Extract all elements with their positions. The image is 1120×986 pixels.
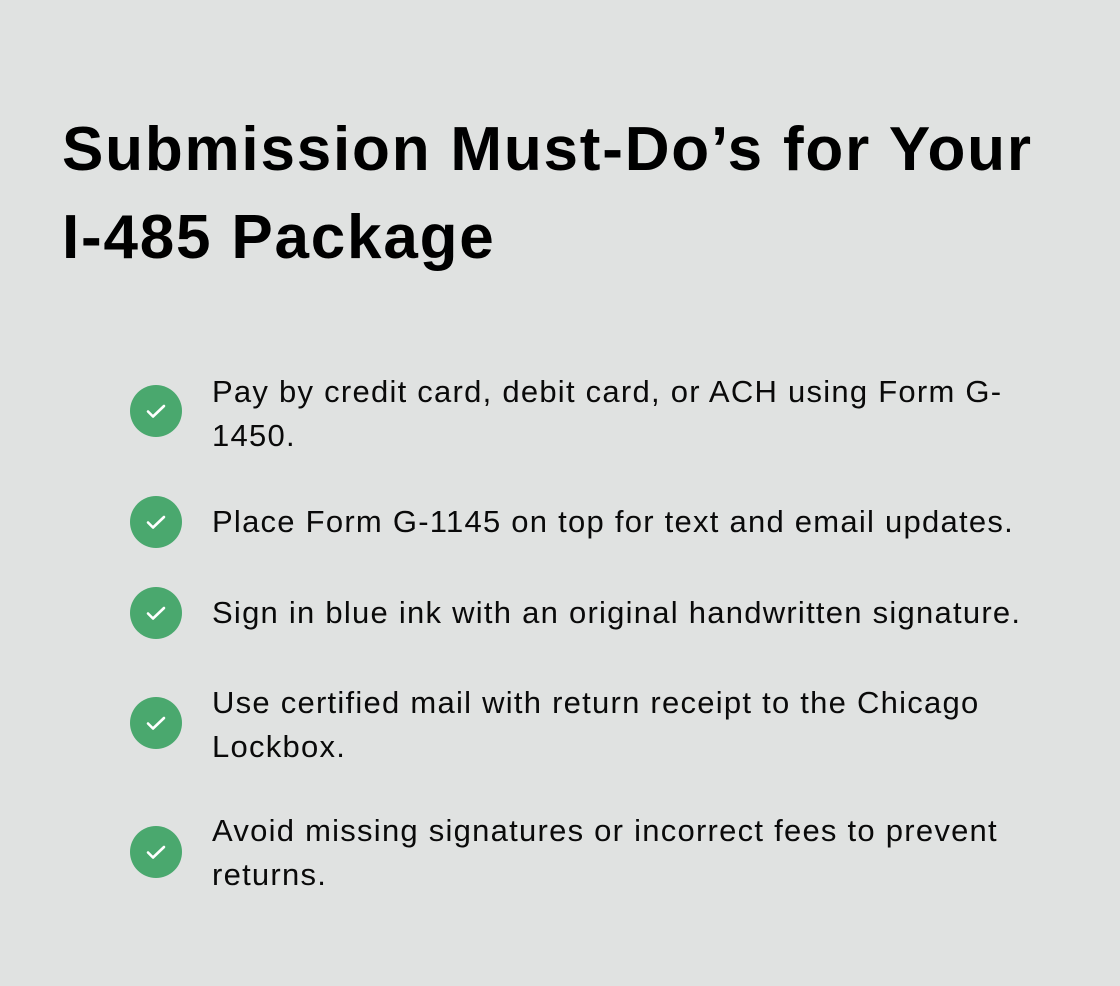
item 4 [130, 685, 980, 764]
icon: check [130, 587, 182, 639]
icon: check [130, 385, 182, 437]
item 1 [130, 374, 1002, 453]
text: Sign in blue ink with an original handwritten signature. [212, 595, 1021, 630]
text [212, 374, 1002, 453]
item 5 [130, 813, 998, 892]
title: I-485 Package [62, 203, 496, 272]
text: returns. [212, 857, 327, 892]
text: Avoid missing signatures or incorrect fees to prevent [212, 813, 998, 848]
icon: check [130, 496, 182, 548]
text: Place Form G-1145 on top for text and email updates. [212, 504, 1014, 539]
item 2 [130, 496, 1014, 548]
item 3 [130, 587, 1021, 639]
text [212, 685, 980, 764]
text: 1450. [212, 418, 296, 453]
title [62, 115, 1033, 272]
text: Pay by credit card, debit card, or ACH using Form G- [212, 374, 1002, 409]
icon: check [130, 826, 182, 878]
icon: check [130, 697, 182, 749]
text: Lockbox. [212, 729, 346, 764]
text [212, 813, 998, 892]
title: Submission Must-Do’s for Your [62, 115, 1033, 184]
text: Use certified mail with return receipt to the Chicago [212, 685, 980, 720]
